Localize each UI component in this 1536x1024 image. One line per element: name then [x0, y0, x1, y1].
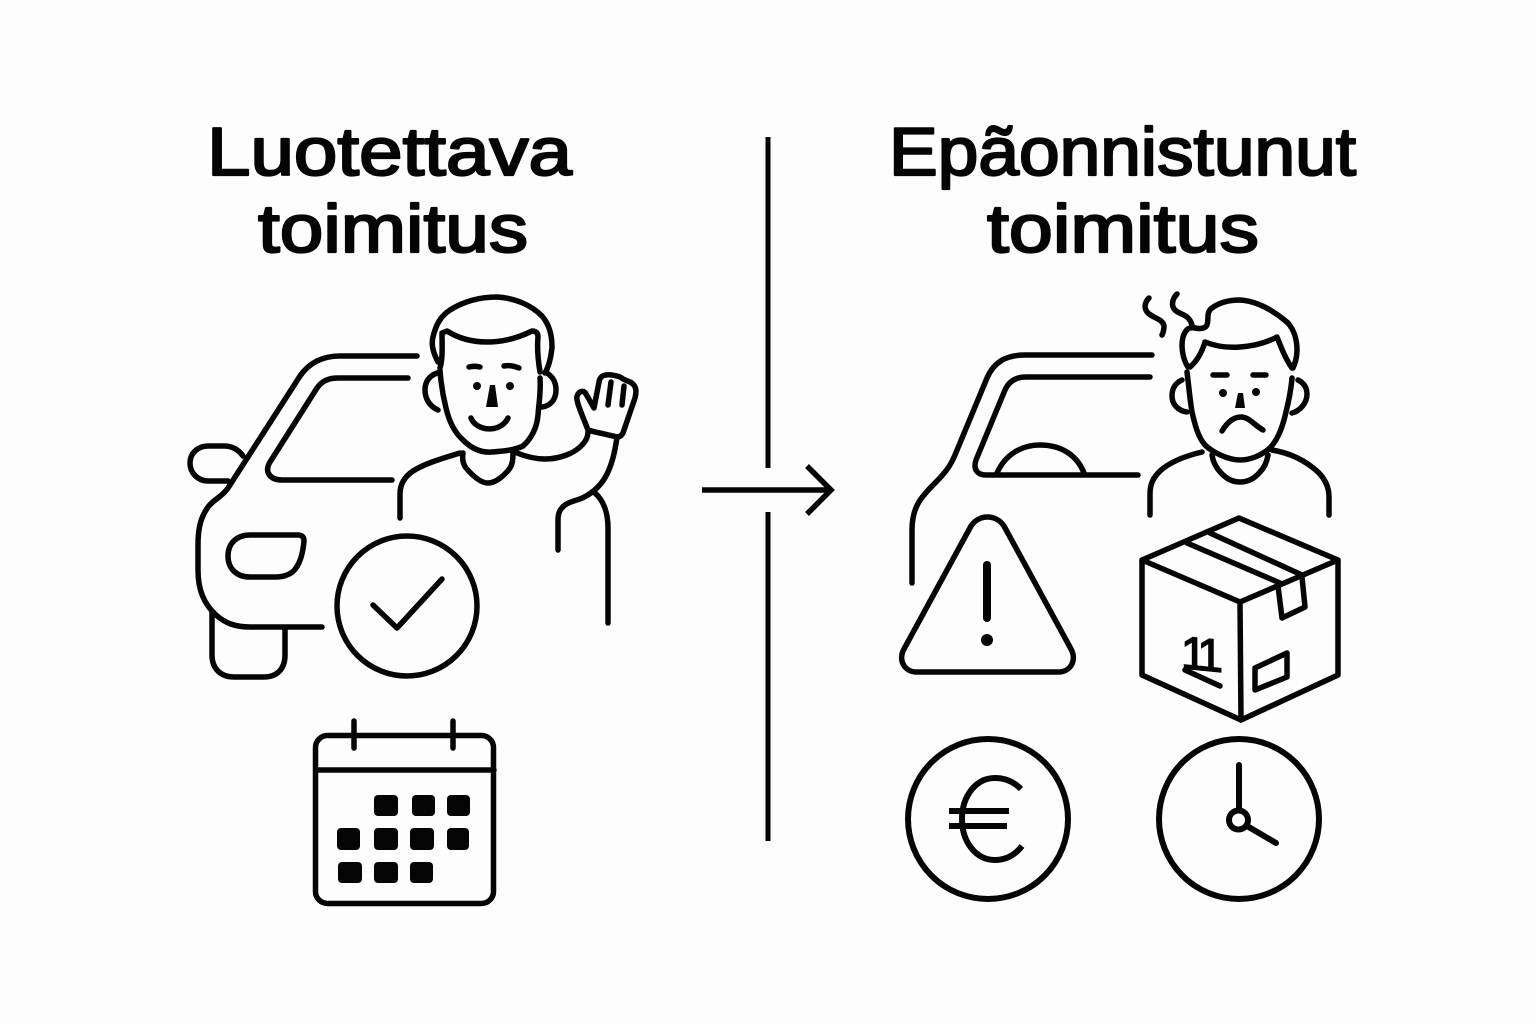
icon: warning triangle: [902, 517, 1073, 672]
icon: waving person: [400, 297, 636, 623]
icon: car outline: [912, 355, 1152, 583]
arrow: [702, 466, 831, 514]
heading: failed delivery: [889, 114, 1356, 267]
icon: clock: [1159, 739, 1319, 899]
heading: reliable delivery: [207, 114, 572, 267]
panel: reliable delivery: [190, 114, 636, 904]
icon: damaged parcel box: 11: [1181, 626, 1223, 682]
icon: car front: [190, 356, 417, 677]
panel: failed delivery: [889, 114, 1356, 899]
icon: euro coin: [908, 739, 1068, 899]
icon: sad person: [1145, 294, 1329, 515]
heading: reliable delivery: Luotettava: [207, 114, 572, 190]
heading: failed delivery: toimitus: [987, 191, 1259, 267]
icon: calendar: [316, 721, 494, 904]
heading: failed delivery: Epãonnistunut: [889, 114, 1356, 190]
heading: reliable delivery: toimitus: [258, 191, 528, 267]
divider line: [766, 137, 770, 841]
icon: check mark circle: [337, 536, 477, 676]
icon: damaged parcel box: [1142, 518, 1338, 720]
